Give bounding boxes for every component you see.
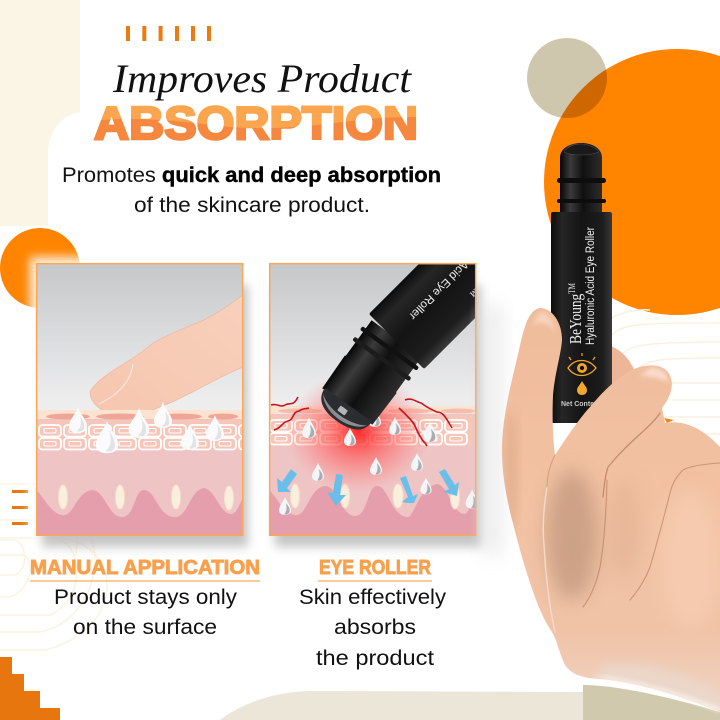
product bottle: Hyaluronic Acid Eye Roller: [585, 227, 597, 345]
description: eye roller: [299, 586, 447, 670]
hand holding bottle: [502, 143, 720, 720]
description: eye roller: the product: [316, 647, 434, 670]
skin layers: [38, 410, 242, 534]
staircase bottom left: [0, 657, 60, 720]
icon: eye with drop: [568, 353, 596, 395]
product drops: [69, 402, 224, 453]
product bottle: [551, 143, 612, 423]
contour lines left: [0, 484, 107, 650]
label: manual application: MANUAL APPLICATION: [30, 556, 260, 579]
tan shape bottom: [220, 691, 583, 720]
panel: eye roller: [268, 262, 486, 552]
hand highlights: [532, 312, 720, 712]
panel: manual application: [30, 257, 261, 547]
bottle label text: BeYoung: [566, 281, 585, 344]
orange sliver: [664, 418, 674, 423]
product bottle: Net Content: [561, 401, 601, 408]
small absorbed drops: [279, 409, 478, 515]
subtitle: Promotes quick and deep absorption: [62, 163, 441, 187]
title: Improves Product: Improves Product: [112, 56, 412, 101]
hand front: [502, 308, 720, 712]
hand shading: [505, 410, 720, 720]
orange circle left: [0, 228, 80, 308]
label: eye roller: EYE ROLLER: [319, 556, 431, 579]
roller body tilted: BeYoung™: [463, 242, 521, 299]
description: eye roller: Skin effectively: [299, 586, 447, 609]
label: eye roller: [299, 556, 447, 670]
description: manual application: [54, 586, 238, 639]
description: manual application: Product stays only: [54, 586, 238, 609]
roller body tilted: [370, 264, 475, 368]
description: manual application: on the surface: [73, 616, 217, 639]
bottle label text: TM: [567, 283, 577, 294]
label: manual application: [30, 556, 260, 639]
orange circle top right: [544, 49, 720, 315]
cream corner shape: [0, 0, 80, 226]
skin layers: [269, 406, 476, 536]
title: ABSORPTION: ABSORPTION: [94, 97, 418, 149]
red glow: [290, 383, 426, 488]
back finger: [600, 345, 636, 400]
tan circle top right: [527, 38, 607, 118]
dashes left: [12, 490, 28, 525]
roller body tilted: Hyaluronic Acid Eye Roller: [406, 217, 511, 322]
contour lines right: [612, 310, 720, 434]
haze beside hand: [482, 305, 502, 555]
red cracks: [271, 397, 452, 446]
finger illustration: [90, 295, 243, 418]
roller cap tilted: [321, 320, 418, 430]
dark tan shape bottom: [583, 685, 720, 720]
decorative ticks above title: [126, 26, 211, 41]
subtitle: of the skincare product.: [134, 193, 370, 217]
subtitle: [62, 163, 441, 217]
finger creases: [543, 413, 720, 632]
blue arrows: [277, 469, 459, 506]
description: eye roller: absorbs: [334, 616, 416, 639]
